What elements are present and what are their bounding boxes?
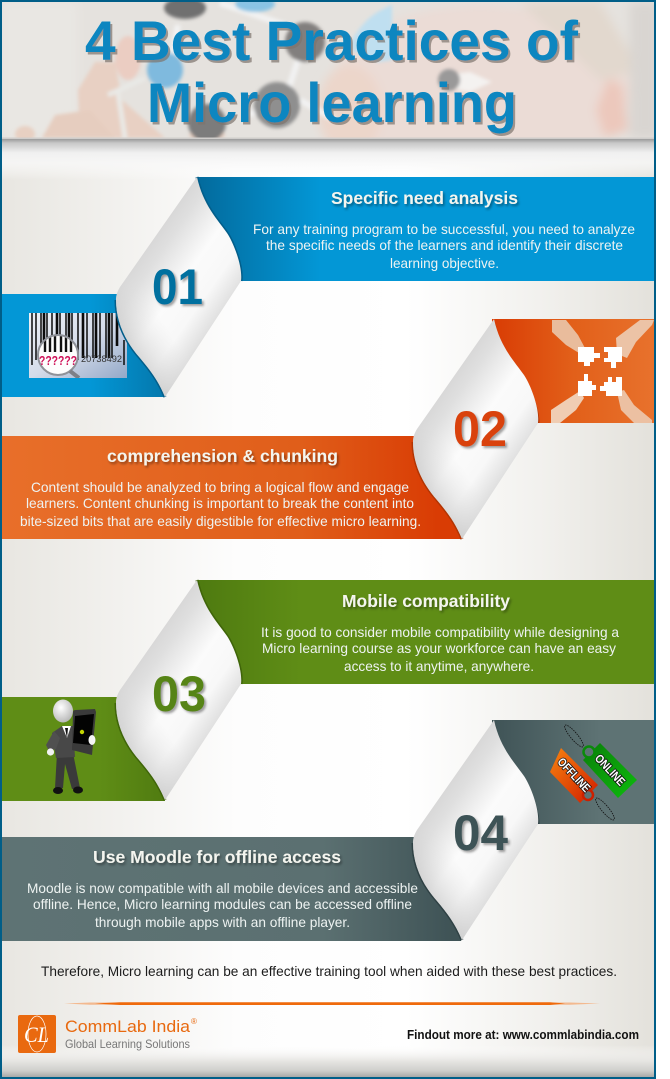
header banner with faded photo [14, 2, 654, 138]
number 02: 02 [453, 401, 507, 457]
title [85, 9, 578, 134]
text block: learning objective. [390, 255, 499, 271]
logo mark [18, 1015, 56, 1053]
ribbon fold [116, 177, 241, 397]
website link text: Findout more at: www.commlabindia.com [407, 1028, 639, 1042]
icon: figure holding phone [46, 700, 96, 794]
text block: the specific needs of the learners and identify their discrete [266, 237, 623, 253]
text block: Content should be analyzed to bring a logical flow and engage [31, 479, 409, 495]
panel: 01 specific need analysis [2, 177, 654, 397]
ribbon fold [413, 319, 538, 539]
heading: Specific need analysis [331, 188, 518, 208]
text block [27, 880, 418, 930]
heading: Mobile compatibility [342, 591, 510, 611]
number 03: 03 [152, 666, 206, 722]
icon: online and offline tags: ONLINE [592, 751, 628, 789]
logo mark: CL [24, 1022, 49, 1047]
text block [20, 479, 421, 529]
icon: online and offline tags [550, 723, 637, 822]
heading: comprehension & chunking [107, 446, 338, 466]
icon: barcode with magnifier: 20738492 [81, 354, 122, 364]
ribbon fold [116, 580, 241, 800]
top right orange band [492, 319, 654, 423]
text block: through mobile apps with an offline player. [95, 914, 350, 930]
text block: access to it anytime, anywhere. [344, 658, 534, 674]
registered mark: ® [191, 1017, 197, 1026]
top right slate band [492, 720, 654, 824]
icon: online and offline tags: OFFLINE [555, 755, 593, 795]
panel: 02 comprehension and chunking [2, 319, 654, 539]
text block [261, 624, 619, 674]
lower slate band [2, 837, 461, 941]
icon: barcode with magnifier [29, 313, 127, 378]
lower orange band [2, 436, 461, 539]
text block: It is good to consider mobile compatibility while designing a [261, 624, 619, 640]
panel: 04 use Moodle for offline access [2, 720, 654, 941]
text block: learners. Content chunking is important to break the content into [26, 495, 414, 511]
ribbon fold [413, 720, 538, 940]
icon: barcode with magnifier: ?????? [39, 354, 77, 368]
right green band [197, 580, 654, 684]
text block [253, 221, 635, 271]
logo name: CommLab India [65, 1017, 191, 1036]
orange divider line [64, 1002, 600, 1005]
icon: hands and puzzle pieces [551, 320, 654, 423]
number 04: 04 [453, 805, 508, 861]
text block: Micro learning course as your workforce can have an easy [262, 640, 616, 656]
header bottom edge [2, 138, 654, 139]
left green band [2, 697, 165, 801]
text block: For any training program to be successful, you need to analyze [253, 221, 635, 237]
title: Micro learning [147, 71, 517, 134]
logo: CommLab India [18, 1015, 197, 1053]
conclusion text: Therefore, Micro learning can be an effective training tool when aided with these best practices. [41, 963, 617, 979]
title: 4 Best Practices of [85, 9, 578, 72]
number 01: 01 [152, 259, 203, 315]
logo tagline: Global Learning Solutions [65, 1037, 190, 1051]
text block: bite-sized bits that are easily digestible for effective micro learning. [20, 513, 421, 529]
text block: offline. Hence, Micro learning modules can be accessed offline [33, 896, 412, 912]
text block: Moodle is now compatible with all mobile devices and accessible [27, 880, 418, 896]
left blue band [2, 294, 165, 397]
heading: Use Moodle for offline access [93, 847, 341, 867]
panel: 03 mobile compatibility [2, 580, 654, 801]
right blue band [197, 177, 654, 281]
